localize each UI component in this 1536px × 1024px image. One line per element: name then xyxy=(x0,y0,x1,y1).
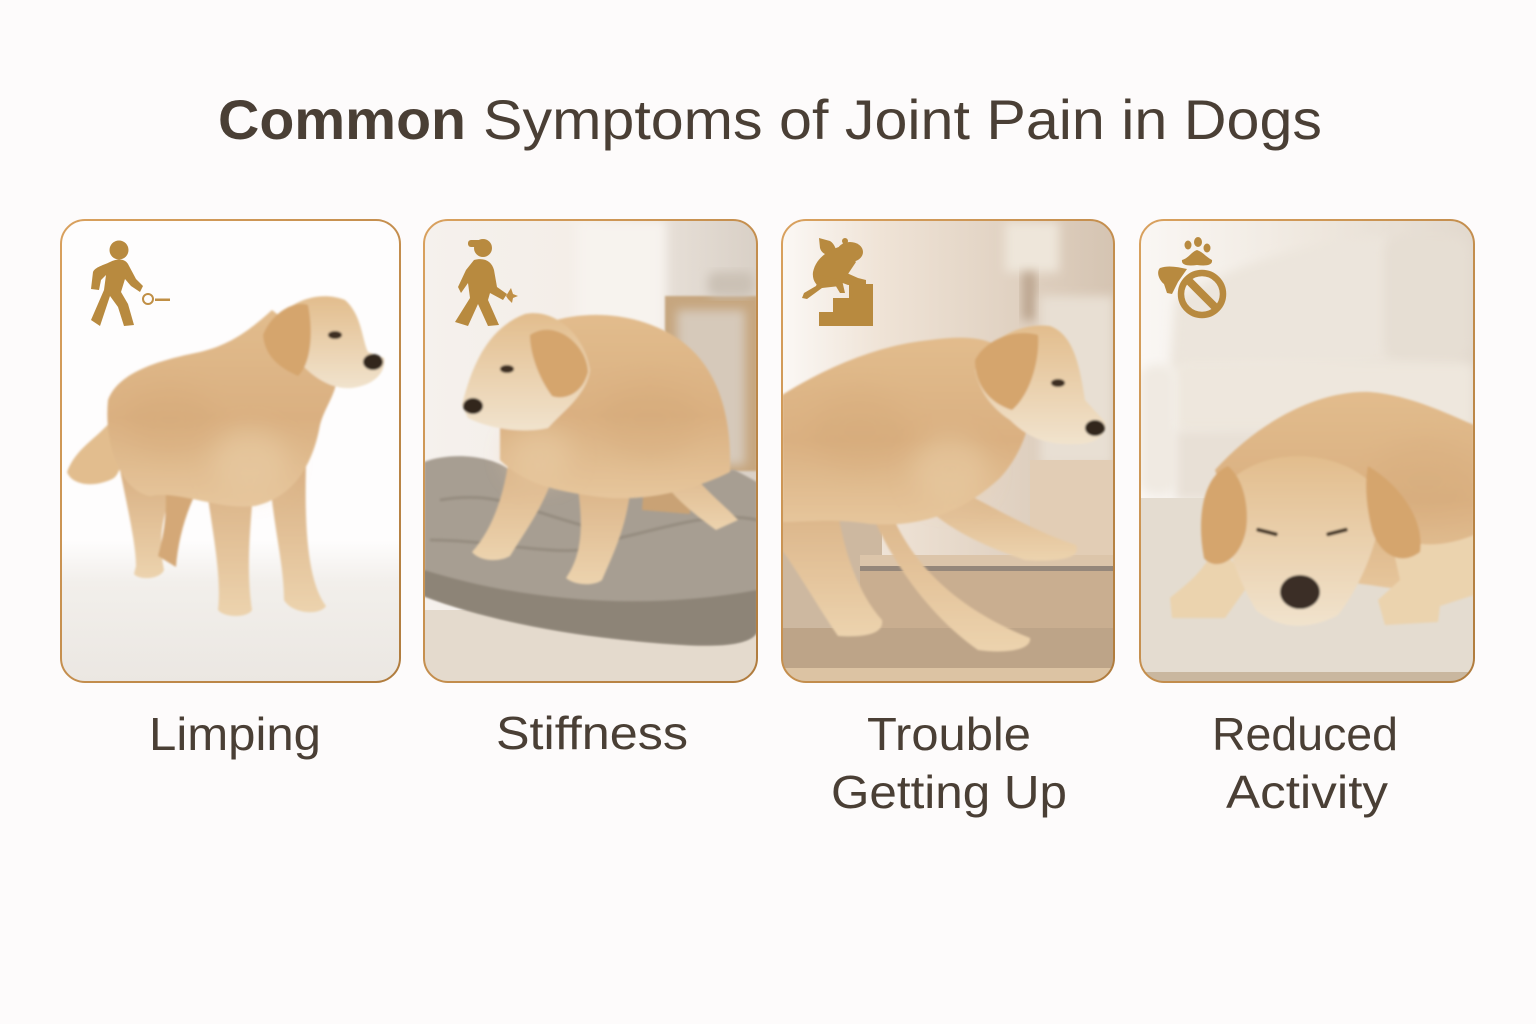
label: trouble getting up xyxy=(831,708,1067,818)
photo background: living room xyxy=(424,220,757,682)
photo: dog climbing step xyxy=(782,325,1105,652)
photo: bed side xyxy=(424,570,757,645)
title: Symptoms of Joint Pain in Dogs xyxy=(483,88,1322,151)
photo: dog bed xyxy=(424,456,757,645)
photo: lying dog xyxy=(1170,392,1475,626)
card border xyxy=(1140,220,1474,682)
card border xyxy=(61,220,400,682)
card border xyxy=(782,220,1114,682)
icon: dog climbing stairs xyxy=(802,238,873,326)
photo background: sofa xyxy=(1140,220,1474,682)
photo background: room with lamp xyxy=(789,221,1113,555)
panel: stiffness xyxy=(424,220,757,682)
photo background: white room and carpet xyxy=(62,564,399,681)
label: stiffness: Stiffness xyxy=(496,707,688,759)
label: reduced activity: Activity xyxy=(1226,766,1388,818)
label: reduced activity xyxy=(1212,708,1398,818)
photo: bed tufts xyxy=(430,497,757,551)
icon: limping person xyxy=(455,239,518,326)
panel: limping xyxy=(61,220,400,682)
photo: standing dog xyxy=(462,313,738,584)
label: trouble getting up: Trouble xyxy=(867,708,1031,760)
label: reduced activity: Reduced xyxy=(1212,708,1398,760)
title: Common xyxy=(218,88,466,151)
panel: trouble getting up xyxy=(782,220,1114,682)
icon: person walking with leash xyxy=(91,240,170,326)
photo: standing dog xyxy=(67,296,384,616)
icon: paw and no-activity sign xyxy=(1158,237,1223,315)
photo: step xyxy=(782,500,1114,682)
card border xyxy=(424,220,757,682)
label: trouble getting up: Getting Up xyxy=(831,766,1067,818)
label: limping: Limping xyxy=(149,708,321,760)
panel: reduced activity xyxy=(1140,220,1475,682)
